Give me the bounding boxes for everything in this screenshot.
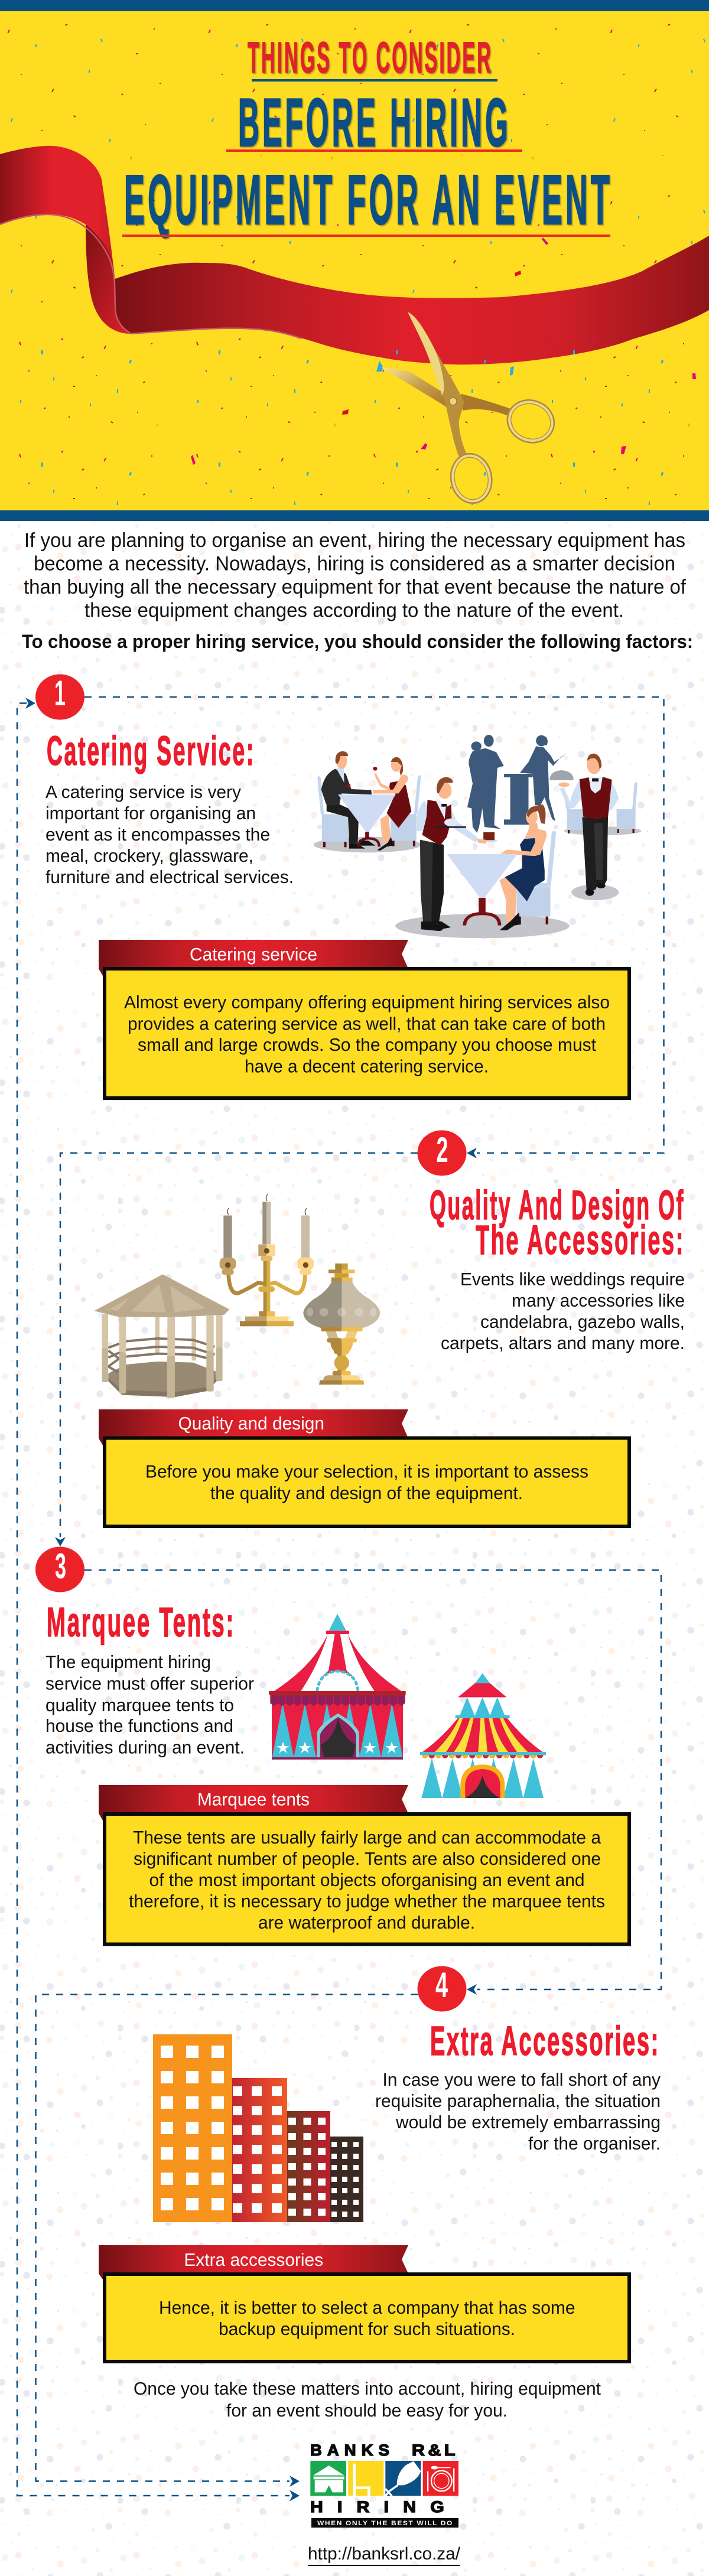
illustration: marquee tents xyxy=(269,1614,546,1798)
lead-in sentence: To choose a proper hiring service, you should consider the following factors: xyxy=(22,631,693,652)
banner: extra accessories xyxy=(99,2245,408,2279)
accessories description xyxy=(441,1269,685,1353)
logo: Banks R&L Hiring xyxy=(310,2441,458,2528)
section 2: quality and design xyxy=(94,1130,685,1526)
website link: http://banksrl.co.za/ xyxy=(308,2544,461,2564)
marquee description: The equipment hiring xyxy=(45,1652,211,1672)
callout box: marquee tents xyxy=(105,1814,629,1945)
intro text: become a necessity. Nowadays, hiring is considered as a smarter decision xyxy=(34,553,675,575)
title xyxy=(124,33,613,239)
icon: oil lamp xyxy=(303,1263,380,1385)
marquee description: quality marquee tents to xyxy=(45,1695,234,1715)
callout box: catering xyxy=(105,969,629,1098)
logo: Banks R&L Hiring: R&L xyxy=(412,2441,458,2459)
catering description: event as it encompasses the xyxy=(45,824,270,845)
heading: marquee tents: Marquee Tents: xyxy=(47,1599,235,1645)
catering description xyxy=(45,781,294,887)
closing text xyxy=(134,2378,601,2421)
accessories description: many accessories like xyxy=(512,1290,685,1311)
logo: Banks R&L Hiring: BANKS xyxy=(310,2441,395,2459)
callout box: extra accessories xyxy=(105,2274,629,2362)
number badge 2 xyxy=(417,1130,467,1175)
extra accessories description: for the organiser. xyxy=(528,2133,661,2154)
extra accessories description: requisite paraphernalia, the situation xyxy=(375,2090,661,2111)
callout box: marquee tents: of the most important objects oforganising an event and xyxy=(149,1870,585,1890)
banner: quality and design xyxy=(99,1409,408,1445)
icon: large red tent xyxy=(269,1614,406,1760)
callout box: quality and design xyxy=(105,1438,629,1526)
intro text: these equipment changes according to the nature of the event. xyxy=(84,599,624,621)
catering description: important for organising an xyxy=(45,803,256,823)
icon: chair tile xyxy=(348,2461,383,2496)
icon: wine glass tile xyxy=(385,2461,421,2496)
callout box: catering: Almost every company offering equipment hiring services also xyxy=(124,992,610,1012)
icon: gold scissors xyxy=(381,312,558,504)
banner: catering service xyxy=(99,940,408,976)
intro text: If you are planning to organise an event, hiring the necessary equipment has xyxy=(24,529,685,552)
marquee description: service must offer superior xyxy=(45,1673,254,1694)
extra accessories description xyxy=(375,2069,661,2154)
icon: tent tile xyxy=(310,2461,346,2496)
catering description: meal, crockery, glassware, xyxy=(45,845,253,866)
catering description: A catering service is very xyxy=(45,781,241,802)
banner: quality and design: Quality and design xyxy=(178,1413,324,1434)
banner: extra accessories: Extra accessories xyxy=(184,2249,323,2270)
illustration: gazebo, candelabra and lamp xyxy=(94,1194,380,1398)
callout box: quality and design: the quality and design of the equipment. xyxy=(210,1483,523,1503)
extra accessories description: would be extremely embarrassing xyxy=(395,2112,661,2132)
marquee description: activities during an event. xyxy=(45,1737,245,1758)
callout box: extra accessories: Hence, it is better to select a company that has some xyxy=(159,2297,575,2318)
illustration: city buildings xyxy=(153,2034,363,2222)
section 3: marquee tents xyxy=(35,1546,629,1945)
banner: marquee tents: Marquee tents xyxy=(197,1789,310,1810)
closing text: Once you take these matters into account, hiring equipment xyxy=(134,2378,601,2399)
logo: Banks R&L Hiring: HIRING xyxy=(310,2498,458,2516)
number badge 4 xyxy=(417,1965,467,2012)
icon: plate tile xyxy=(423,2461,458,2496)
accessories description: Events like weddings require xyxy=(460,1269,685,1289)
extra accessories description: In case you were to fall short of any xyxy=(383,2069,661,2090)
section 4: extra accessories xyxy=(99,1965,661,2362)
arrows xyxy=(25,698,477,2501)
callout box: catering: small and large crowds. So the company you choose must xyxy=(138,1034,596,1055)
banner: marquee tents xyxy=(99,1785,408,1821)
illustration: restaurant scene with waiters and diners xyxy=(314,735,641,938)
catering description: furniture and electrical services. xyxy=(45,867,294,887)
callout box: marquee tents: significant number of people. Tents are also considered one xyxy=(134,1848,601,1869)
icon: red ribbon xyxy=(0,146,709,364)
number badge 3 xyxy=(35,1546,84,1593)
icon: candelabra xyxy=(220,1194,314,1326)
callout box: catering: provides a catering service as well, that can take care of both xyxy=(128,1014,606,1034)
number badge 3: 3 xyxy=(55,1546,66,1586)
banner: catering service: Catering service xyxy=(190,944,317,965)
heading: catering service: Catering Service: xyxy=(47,728,255,774)
tagline bar: WHEN ONLY THE BEST WILL DO xyxy=(317,2520,453,2527)
accessories description: carpets, altars and many more. xyxy=(441,1333,685,1353)
callout box: catering: have a decent catering service. xyxy=(245,1056,489,1076)
number badge 2: 2 xyxy=(436,1130,448,1170)
marquee description xyxy=(45,1652,254,1758)
intro text: than buying all the necessary equipment for that event because the nature of xyxy=(24,576,687,598)
header banner xyxy=(0,0,709,521)
section 1: catering service xyxy=(35,673,641,1098)
callout box: marquee tents: These tents are usually fairly large and can accommodate a xyxy=(133,1827,601,1848)
callout box: quality and design: Before you make your selection, it is important to assess xyxy=(145,1461,588,1481)
number badge 4: 4 xyxy=(435,1965,448,2005)
accessories description: candelabra, gazebo walls, xyxy=(480,1311,685,1332)
callout box: marquee tents: therefore, it is necessary to judge whether the marquee tents xyxy=(129,1891,605,1911)
tagline bar xyxy=(311,2518,458,2528)
callout box: extra accessories: backup equipment for such situations. xyxy=(219,2318,515,2339)
intro text xyxy=(24,529,687,621)
number badge 1 xyxy=(35,673,84,719)
callout box: marquee tents: are waterproof and durable. xyxy=(258,1912,475,1933)
heading: quality and design xyxy=(430,1182,685,1263)
dashed connector paths xyxy=(17,697,664,2496)
marquee description: house the functions and xyxy=(45,1715,233,1736)
closing text: for an event should be easy for you. xyxy=(226,2400,508,2421)
number badge 1: 1 xyxy=(54,673,66,713)
icon: striped small tent xyxy=(420,1673,546,1798)
icon: gazebo xyxy=(94,1274,229,1398)
